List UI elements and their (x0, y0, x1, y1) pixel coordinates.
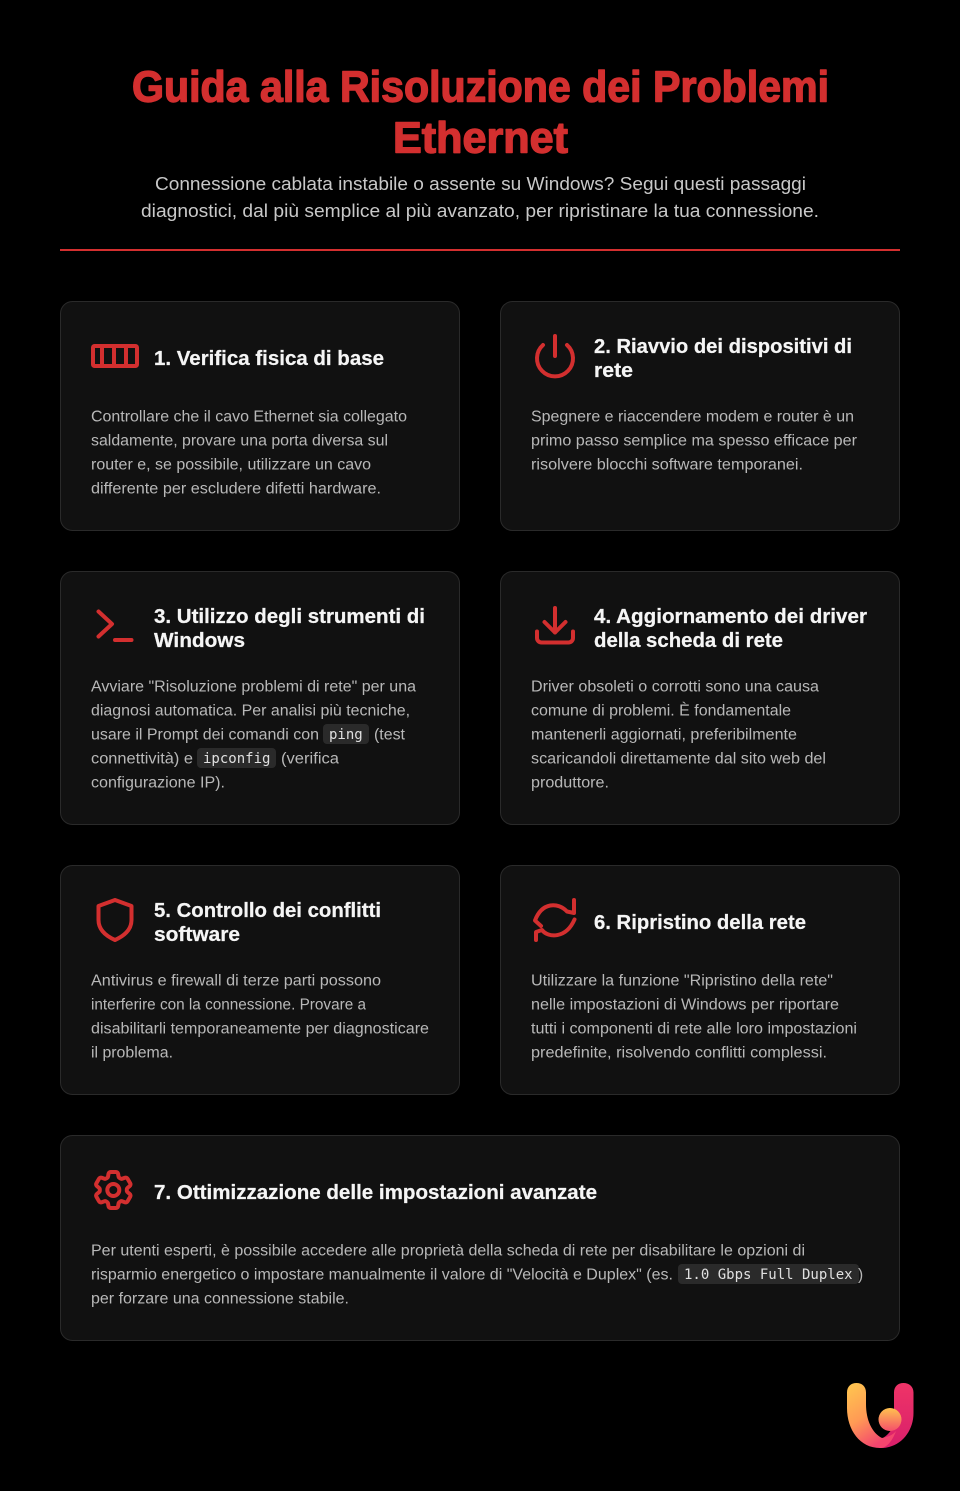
title: Guida alla Risoluzione dei Problemi (132, 62, 829, 112)
icon: download (537, 608, 573, 642)
subtitle: diagnostici, dal più semplice al più avanzato, per ripristinare la tua connessione. (141, 200, 819, 221)
text: step 5: Antivirus e firewall di terze parti possono (91, 972, 381, 990)
heading: step 2 (594, 335, 852, 382)
panel: step 7 (60, 1136, 900, 1340)
text: step 7: 1.0 Gbps Full Duplex (684, 1267, 853, 1283)
text: step 1: saldamente, provare una porta diversa sul (91, 432, 388, 450)
text: step 4: comune di problemi. È fondamentale (531, 702, 791, 720)
text: step 5: il problema. (91, 1044, 173, 1062)
heading: step 4: della scheda di rete (594, 629, 783, 652)
text: step 5: interferire con la connessione. Provare a (91, 996, 366, 1014)
text: step 4 (531, 678, 826, 792)
heading: step 2: rete (594, 359, 633, 382)
text: step 2: risolvere blocchi software temporanei. (531, 456, 803, 474)
text: step 1: Controllare che il cavo Ethernet sia collegato (91, 408, 407, 426)
text: step 7: Per utenti esperti, è possibile accedere alle proprietà della scheda di rete per disabilitare le opzioni di (91, 1242, 805, 1260)
text: step 3: usare il Prompt dei comandi con (91, 726, 319, 744)
text: step 6: tutti i componenti di rete alle loro impostazioni (531, 1020, 857, 1038)
text: step 6: predefinite, risolvendo conflitti complessi. (531, 1044, 827, 1062)
icon: refresh (535, 900, 574, 940)
heading: step 2: 2. Riavvio dei dispositivi di (594, 335, 852, 358)
heading: step 4 (594, 605, 867, 652)
text: step 4: mantenerli aggiornati, preferibilmente (531, 726, 797, 744)
text: step 2: primo passo semplice ma spesso efficace per (531, 432, 857, 450)
panel: step 1 (60, 302, 460, 530)
heading: step 3 (154, 605, 425, 652)
panel: step 5 (60, 866, 460, 1094)
icon: ethernet port (93, 346, 137, 366)
logo (847, 1383, 914, 1448)
panel: step 6 (500, 866, 900, 1094)
heading: step 4: 4. Aggiornamento dei driver (594, 605, 867, 628)
header (60, 62, 900, 251)
text: step 6: nelle impostazioni di Windows per riportare (531, 996, 839, 1014)
text: step 6 (531, 972, 857, 1062)
text: step 1 (91, 408, 407, 498)
heading: step 6: 6. Ripristino della rete (594, 911, 806, 934)
icon: power (537, 336, 573, 376)
text: step 1: router e, se possibile, utilizzare un cavo (91, 456, 371, 474)
icon: shield (98, 900, 132, 940)
text: step 5: disabilitarli temporaneamente per diagnosticare (91, 1020, 429, 1038)
text: step 3: configurazione IP). (91, 774, 225, 792)
title: Ethernet (393, 114, 568, 162)
icon: terminal (98, 612, 132, 640)
text: step 3: connettività) e (91, 750, 193, 768)
subtitle (141, 173, 819, 221)
text: step 7: ) (858, 1266, 863, 1284)
text: step 4: scaricandoli direttamente dal sito web del (531, 750, 826, 768)
panel: step 2 (500, 302, 900, 530)
heading: step 5: 5. Controllo dei conflitti (154, 899, 381, 922)
heading: step 7: 7. Ottimizzazione delle impostazioni avanzate (154, 1181, 597, 1204)
text: step 7: per forzare una connessione stabile. (91, 1290, 349, 1308)
text: step 3: ipconfig (203, 751, 270, 767)
text: step 3: diagnosi automatica. Per analisi più tecniche, (91, 702, 410, 720)
heading: step 1: 1. Verifica fisica di base (154, 347, 384, 370)
heading: step 3: 3. Utilizzo degli strumenti di (154, 605, 425, 628)
heading: step 3: Windows (154, 629, 245, 652)
text: step 3: (verifica (281, 750, 339, 768)
text: step 3: (test (374, 726, 406, 744)
text: step 3: Avviare "Risoluzione problemi di rete" per una (91, 678, 416, 696)
text: step 2 (531, 408, 857, 474)
panel: step 3 (60, 572, 460, 824)
icon: gear (96, 1172, 130, 1208)
text: step 7: risparmio energetico o impostare manualmente il valore di "Velocità e Duplex" (es. (91, 1266, 673, 1284)
text: step 2: Spegnere e riaccendere modem e router è un (531, 408, 854, 426)
text: step 7 (91, 1242, 863, 1308)
title (132, 62, 829, 162)
text: step 4: produttore. (531, 774, 609, 792)
text: step 1: differente per escludere difetti hardware. (91, 480, 381, 498)
text: step 4: Driver obsoleti o corrotti sono una causa (531, 678, 819, 696)
heading: step 5 (154, 899, 381, 946)
text: step 5 (91, 972, 429, 1062)
text: step 6: Utilizzare la funzione "Ripristino della rete" (531, 972, 833, 990)
heading: step 5: software (154, 923, 240, 946)
text: step 3 (91, 678, 416, 792)
text: step 3: ping (329, 727, 363, 743)
panel: step 4 (500, 572, 900, 824)
subtitle: Connessione cablata instabile o assente su Windows? Segui questi passaggi (155, 173, 806, 194)
